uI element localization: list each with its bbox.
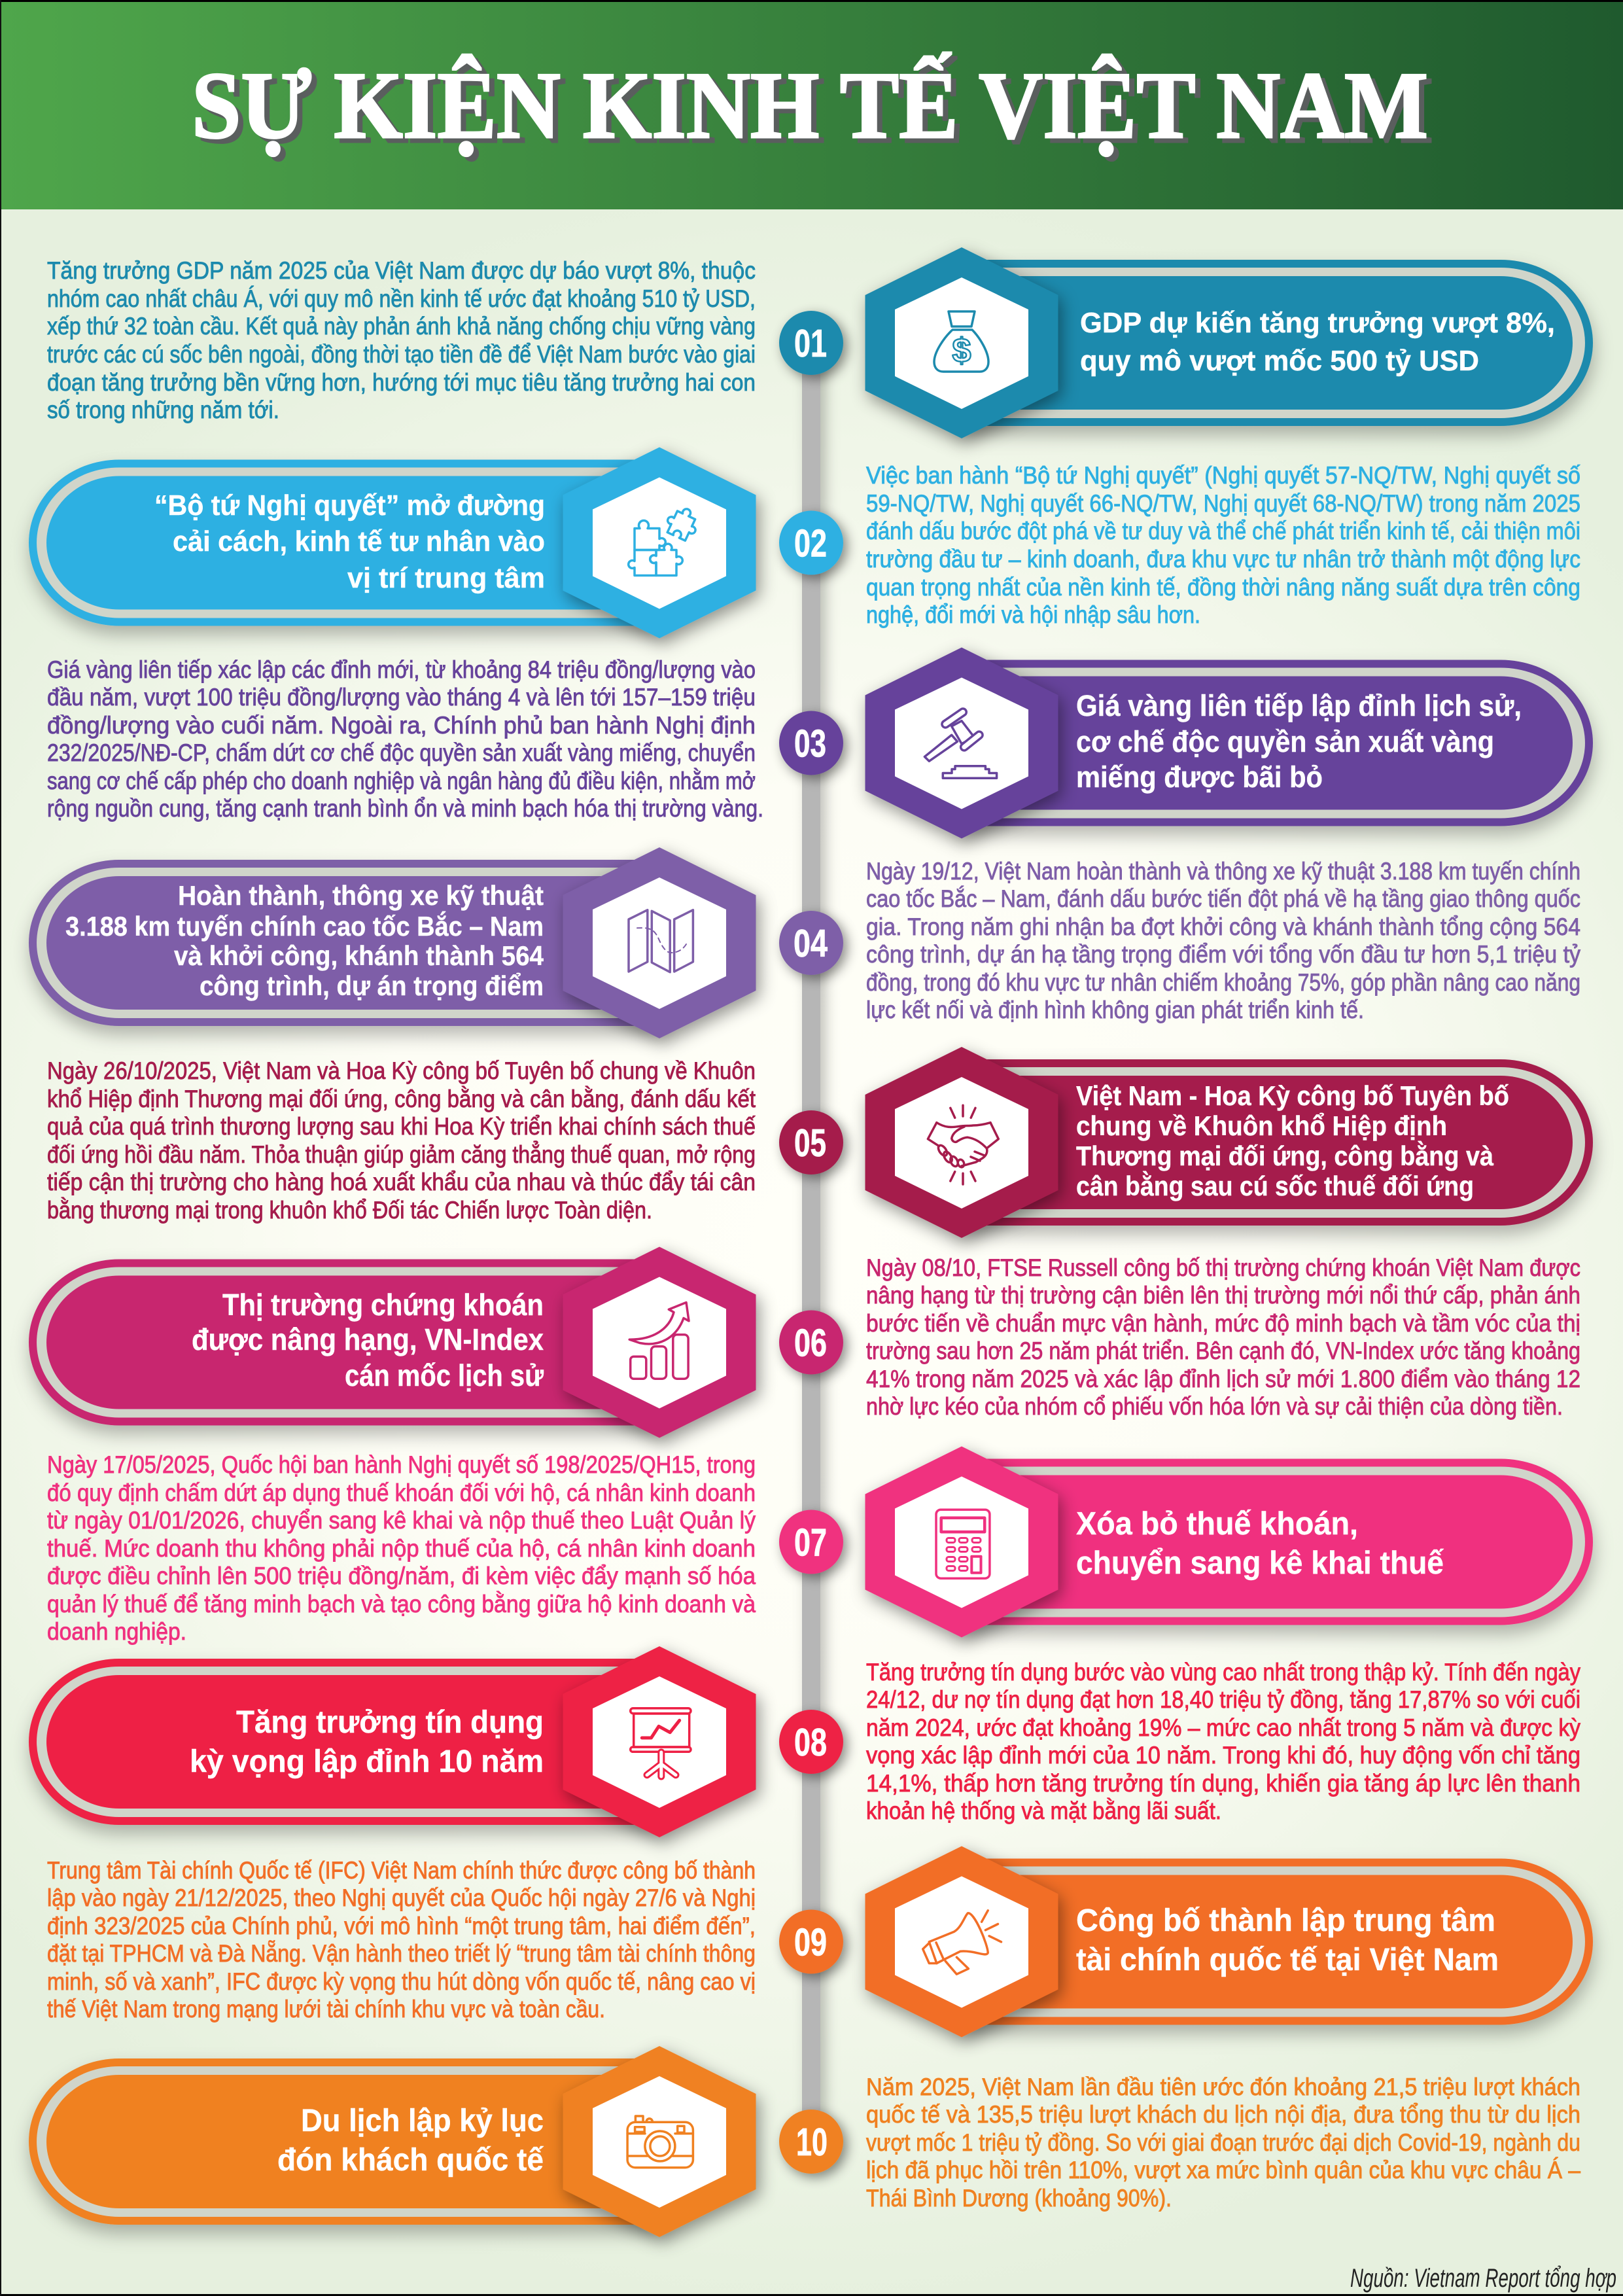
icon: rising chart [629,1302,689,1379]
number 09: 09 [794,1921,827,1964]
text block 09: thế Việt Nam trong mạng lưới tài chính khu vực và toàn cầu. [47,1996,605,2022]
number 08: 08 [794,1721,827,1764]
text block 05: đối ứng hồi đầu năm. Thỏa thuận giúp giảm căng thẳng thuế quan, mở rộng [47,1140,756,1168]
banner 05 [962,1059,1593,1226]
icon: money bag [934,311,988,372]
text block 01: đoạn tăng trưởng bền vững hơn, hướng tới mục tiêu tăng trưởng hai con [47,369,756,396]
text block 05: bằng thương mại trong khuôn khổ Đối tác Chiến lược Toàn diện. [47,1197,652,1224]
hexagon 06 [563,1247,756,1438]
text block 03: Giá vàng liên tiếp xác lập các đỉnh mới, từ khoảng 84 triệu đồng/lượng vào [47,656,756,683]
text block 05 [47,1057,756,1224]
banner 08 [29,1659,659,1825]
heading 04: Hoàn thành, thông xe kỹ thuật [178,880,544,911]
number 07: 07 [794,1521,827,1564]
text block 08 [866,1659,1580,1824]
number 02 [779,510,843,574]
heading 06: cán mốc lịch sử [345,1358,544,1392]
hexagon 05 [865,1047,1058,1238]
number 05 [779,1110,843,1174]
heading 10: đón khách quốc tế [277,2143,544,2178]
number 06: 06 [794,1322,827,1365]
heading 03: miếng được bãi bỏ [1076,760,1323,794]
text block 10: quốc tế và 135,5 triệu lượt khách du lịch nội địa, đưa tổng thu từ du lịch [866,2101,1580,2128]
text block 04: công trình, dự án hạ tầng trọng điểm với tổng vốn đầu tư hơn 5,1 triệu tỷ [866,941,1580,968]
heading 03: Giá vàng liên tiếp lập đỉnh lịch sử, [1076,689,1522,722]
heading 08: Tăng trưởng tín dụng [236,1705,544,1740]
text block 10: Năm 2025, Việt Nam lần đầu tiên ước đón khoảng 21,5 triệu lượt khách [866,2074,1580,2100]
text block 05: quả của quá trình thương lượng sau khi Hoa Kỳ triển khai chính sách thuế [47,1113,756,1140]
heading 10 [277,2104,544,2178]
hexagon 02 [563,448,756,639]
heading 01: quy mô vượt mốc 500 tỷ USD [1080,345,1479,377]
panel: item 05 trade framework [47,1047,1593,1238]
text block 07: Ngày 17/05/2025, Quốc hội ban hành Nghị quyết số 198/2025/QH15, trong [47,1451,756,1478]
number 03 [779,711,843,775]
text block 01: số trong những năm tới. [47,397,279,423]
banner 06 [29,1259,659,1425]
panel: item 03 gold [47,648,1593,839]
number 03: 03 [794,722,826,766]
text block 07: quản lý thuế để tăng minh bạch và tạo công bằng giữa hộ kinh doanh và [47,1591,756,1617]
icon: megaphone [923,1911,1001,1974]
text block 03 [47,656,763,822]
text block 03: đầu năm, vượt 100 triệu đồng/lượng vào tháng 4 và lên tới 157–159 triệu [47,684,756,711]
hexagon 03 [865,648,1058,839]
icon: calculator [936,1510,990,1578]
number 04 [779,911,843,975]
number 10: 10 [796,2121,828,2164]
heading 01 [1080,307,1555,377]
text block 03: sang cơ chế cấp phép cho doanh nghiệp và ngân hàng đủ điều kiện, nhằm mở [47,768,756,794]
heading 04: 3.188 km tuyến chính cao tốc Bắc – Nam [65,910,544,942]
panel: item 07 tax [47,1446,1593,1645]
text block 01: trước các cú sốc bên ngoài, đồng thời tạo tiền đề để Việt Nam bước vào giai [47,341,756,368]
icon: handshake [928,1105,998,1184]
panel: item 01 GDP [47,247,1593,438]
heading 02: “Bộ tứ Nghị quyết” mở đường [154,489,545,521]
icon: folded map [629,910,693,972]
text block 06 [866,1254,1580,1420]
text block 02: nghệ, đổi mới và hội nhập sâu hơn. [866,601,1200,628]
icon: puzzle [629,503,703,576]
number 05: 05 [794,1122,826,1165]
number 07 [779,1510,843,1574]
panel: item 02 Nghị quyết [29,448,1580,639]
heading 09 [1076,1903,1499,1977]
text block 07: từ ngày 01/01/2026, chuyển sang kê khai và nộp thuế theo Luật Quản lý [47,1507,756,1534]
heading 05: chung về Khuôn khổ Hiệp định [1076,1110,1447,1141]
number 01: 01 [794,322,827,365]
panel: item 04 expressway [29,847,1580,1038]
text block 10: Thái Bình Dương (khoảng 90%). [866,2185,1172,2212]
heading 03: cơ chế độc quyền sản xuất vàng [1076,725,1494,758]
heading 02: vị trí trung tâm [347,562,545,594]
title: SỰ KIỆN KINH TẾ VIỆT NAM [192,52,1428,158]
banner 01 [962,260,1593,426]
heading 08 [190,1705,544,1779]
text block 07: đó quy định chấm dứt áp dụng thuế khoán đối với hộ, cá nhân kinh doanh [47,1479,756,1506]
heading 04: công trình, dự án trọng điểm [200,970,544,1001]
hexagon 08 [563,1646,756,1837]
hexagon 09 [865,1846,1058,2038]
text block 04: lực kết nối và định hình không gian phát triển kinh tế. [866,997,1364,1023]
text block 01: xếp thứ 32 toàn cầu. Kết quả này phản ánh khả năng chống chịu vững vàng [47,313,756,340]
heading 09: Công bố thành lập trung tâm [1076,1903,1495,1938]
text block 05: Ngày 26/10/2025, Việt Nam và Hoa Kỳ công bố Tuyên bố chung về Khuôn [47,1057,756,1084]
panel: item 10 tourism [29,2046,1580,2237]
banner 09 [962,1858,1593,2024]
text block 04 [866,858,1580,1023]
number 10 [779,2110,843,2174]
text block 08: 14,1%, thấp hơn tăng trưởng tín dụng, khiến gia tăng áp lực lên thanh [866,1770,1580,1797]
text block 10 [866,2074,1580,2212]
text block 01: nhóm cao nhất châu Á, với quy mô nền kinh tế ước đạt khoảng 510 tỷ USD, [47,285,756,312]
hexagon 10 [563,2046,756,2237]
header band [0,2,1623,209]
banner 07 [962,1459,1593,1625]
text block 09: định 323/2025 của Chính phủ, với mô hình “một trung tâm, hai điểm đến”, [47,1913,756,1939]
text block 07: thuế. Mức doanh thu không phải nộp thuế của hộ, cá nhân kinh doanh [47,1535,756,1562]
number 02: 02 [794,522,827,565]
heading 05: cân bằng sau cú sốc thuế đối ứng [1076,1170,1474,1201]
heading 10: Du lịch lập kỷ lục [301,2104,544,2138]
text block 01: Tăng trưởng GDP năm 2025 của Việt Nam được dự báo vượt 8%, thuộc [47,257,756,284]
heading 06 [192,1288,544,1392]
text block 03: rộng nguồn cung, tăng cạnh tranh bình ổn và minh bạch hóa thị trường vàng. [47,795,763,822]
text block 01 [47,257,756,423]
heading 07 [1076,1506,1444,1581]
banner 10 [29,2058,659,2225]
heading 07: Xóa bỏ thuế khoán, [1076,1506,1358,1542]
icon: camera [627,2116,693,2168]
banner 03 [962,660,1593,826]
text block 02: Việc ban hành “Bộ tứ Nghị quyết” (Nghị quyết 57-NQ/TW, Nghị quyết số [866,462,1580,489]
heading 05 [1076,1080,1509,1201]
text block 08: khoản hệ thống và mặt bằng lãi suất. [866,1797,1221,1824]
banner 04 [29,860,659,1026]
heading 05: Thương mại đối ứng, công bằng và [1076,1140,1494,1171]
title: SỰ KIỆN KINH TẾ VIỆT NAM [197,56,1433,163]
text block 07: được điều chỉnh lên 500 triệu đồng/năm, đi kèm việc đẩy mạnh số hóa [47,1563,756,1589]
text block 09 [47,1857,756,2022]
icon: gavel [924,712,997,778]
text block 07: doanh nghiệp. [47,1618,186,1645]
panel: item 06 stock market [29,1247,1580,1438]
text block 08: vọng xác lập đỉnh mới của 10 năm. Trong khi đó, huy động vốn chỉ tăng [866,1742,1580,1769]
text block 03: đồng/lượng vào cuối năm. Ngoài ra, Chính phủ ban hành Nghị định [47,712,756,739]
text block 07 [47,1451,756,1645]
icon: presentation board [631,1708,691,1776]
panel: item 08 credit [29,1646,1580,1837]
number 09 [779,1909,843,1973]
heading 02: cải cách, kinh tế tư nhân vào [173,525,545,557]
icon: money bag: $ [952,332,971,370]
hexagon 07 [865,1446,1058,1637]
banner 02 [29,459,659,626]
timeline rail [802,343,820,2142]
hexagon 04 [563,847,756,1038]
number 01 [779,311,843,375]
heading 09: tài chính quốc tế tại Việt Nam [1076,1943,1499,1977]
heading 05: Việt Nam - Hoa Kỳ công bố Tuyên bố [1076,1080,1509,1111]
heading 06: Thị trường chứng khoán [222,1288,544,1322]
heading 04: và khởi công, khánh thành 564 [174,940,544,971]
heading 07: chuyển sang kê khai thuế [1076,1545,1444,1581]
heading 01: GDP dự kiến tăng trưởng vượt 8%, [1080,307,1555,339]
heading 03 [1076,689,1522,794]
text block 09: Trung tâm Tài chính Quốc tế (IFC) Việt Nam chính thức được công bố thành [47,1857,756,1884]
text block 09: minh, số và xanh”, IFC được kỳ vọng thu hút dòng vốn quốc tế, nâng cao vị [47,1968,756,1995]
text block 09: đặt tại TPHCM và Đà Nẵng. Vận hành theo triết lý “trung tâm tài chính thông [47,1940,756,1967]
text block 05: tiếp cận thị trường cho hàng hoá xuất khẩu của nhau và thúc đẩy tái cân [47,1169,756,1195]
panel: item 09 financial centre [47,1846,1593,2038]
hexagon 01 [865,247,1058,438]
number 08 [779,1710,843,1774]
heading 04 [65,880,544,1001]
text block 02 [866,462,1580,628]
heading 02 [154,489,545,594]
text block 03: 232/2025/NĐ-CP, chấm dứt cơ chế độc quyền sản xuất vàng miếng, chuyển [47,739,756,766]
text block 05: khổ Hiệp định Thương mại đối ứng, công bằng và cân bằng, đánh dấu kết [47,1086,756,1112]
heading 08: kỳ vọng lập đỉnh 10 năm [190,1744,544,1779]
number 06 [779,1310,843,1374]
heading 06: được nâng hạng, VN-Index [192,1322,544,1356]
number 04: 04 [794,922,828,965]
text block 09: lập vào ngày 21/12/2025, theo Nghị quyết của Quốc hội ngày 27/6 và Nghị [47,1884,756,1911]
